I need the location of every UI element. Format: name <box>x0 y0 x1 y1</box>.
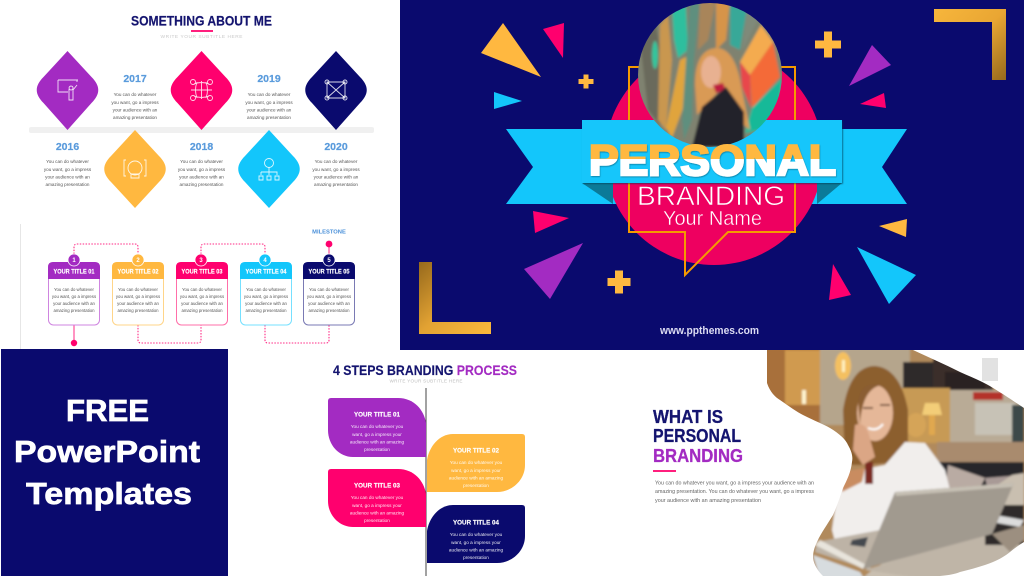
year 2016 block: amazing presentation <box>46 182 90 187</box>
leaf step 03: want, go a impress your <box>352 503 402 508</box>
title underline <box>191 30 213 32</box>
ribbon back <box>506 129 907 204</box>
timeline bar <box>29 127 374 133</box>
text: your name: Your Name <box>663 208 762 230</box>
leaf step 02: YOUR TITLE 02 <box>453 448 500 454</box>
paragraph: amazing presentation. You can do whatever you want, go a impress <box>655 489 814 495</box>
year 2019 block: You can do whatever <box>248 92 291 97</box>
card 3: You can do whatever <box>182 287 223 292</box>
card 1: YOUR TITLE 01 <box>54 270 95 276</box>
leaf step 04: want, go a impress your <box>451 540 501 545</box>
year 2016 block: your audience with an <box>45 174 90 180</box>
speech bubble outline <box>629 67 795 275</box>
diamond 2018 pink <box>171 51 232 130</box>
card 1: 1 <box>72 258 76 264</box>
card 5: you want, go a impress <box>307 294 351 299</box>
text: free: FREE <box>66 393 149 428</box>
leaf step 01: You can do whatever you <box>351 424 404 429</box>
leaf step 01: YOUR TITLE 01 <box>354 412 401 418</box>
panel: something about me timeline <box>29 14 374 208</box>
leaf step 01 <box>328 398 426 457</box>
pink circle <box>605 47 823 265</box>
heading lines: BRANDING <box>653 445 743 466</box>
card 1 <box>48 254 100 325</box>
card 5: amazing presentation <box>308 308 350 313</box>
card 4: You can do whatever <box>246 287 287 292</box>
diamond 2016 purple <box>37 51 98 130</box>
leaf step 04: audience with an amazing <box>449 548 503 552</box>
diamond 2019 cyan <box>238 130 300 208</box>
leaf step 01: audience with an amazing <box>350 440 404 444</box>
milestone label: MILESTONE <box>312 230 346 236</box>
year 2017 block <box>111 73 159 120</box>
leaf step 04: You can do whatever you <box>450 532 503 537</box>
subtitle: WRITE YOUR SUBTITLE HERE <box>390 378 462 384</box>
card 4: 4 <box>263 258 267 264</box>
leaf step 03: presentation <box>364 518 390 523</box>
heading lines: WHAT IS <box>653 406 723 427</box>
card 5: your audience with an <box>308 301 351 306</box>
card 4: your audience with an <box>245 301 288 306</box>
gold corner bottom left <box>419 262 491 334</box>
icon: plus signs <box>578 32 841 294</box>
card 4 <box>240 254 292 325</box>
ribbon front <box>582 120 842 183</box>
year 2017 block: amazing presentation <box>113 115 157 120</box>
card 4: amazing presentation <box>245 308 287 313</box>
leaf step 04: YOUR TITLE 04 <box>453 520 500 526</box>
card 2 <box>112 254 164 325</box>
dashed connectors <box>71 241 332 346</box>
year 2020 block <box>312 141 360 187</box>
card 1: amazing presentation <box>53 308 95 313</box>
panel: free powerpoint templates <box>1 349 228 576</box>
photo: woman with laptop <box>760 345 1024 576</box>
gold corner top right <box>934 9 1006 80</box>
paragraph <box>655 480 814 504</box>
card 2: You can do whatever <box>118 287 159 292</box>
leaf step 02: You can do whatever you <box>450 460 503 465</box>
leaf step 01: want, go a impress your <box>352 432 402 437</box>
panel: what is personal branding <box>653 345 1024 576</box>
heading underline <box>653 470 676 472</box>
year 2016 block <box>44 141 92 187</box>
leaf step 02: want, go a impress your <box>451 468 501 473</box>
diamond 2017 gold <box>104 130 166 208</box>
card 1: your audience with an <box>53 301 96 306</box>
year 2020 block: You can do whatever <box>315 159 358 164</box>
leaf step 04: presentation <box>463 555 489 560</box>
leaf step 02 <box>427 434 525 492</box>
heading: personal: PERSONAL <box>589 137 836 185</box>
card 2: you want, go a impress <box>116 294 160 299</box>
paragraph: your audience with an amazing presentation <box>655 498 761 504</box>
text: templates: Templates <box>26 476 192 511</box>
year 2019 block: 2019 <box>257 73 281 85</box>
card 1: You can do whatever <box>54 287 95 292</box>
website url: www.ppthemes.com <box>659 325 759 337</box>
title: something about me: SOMETHING ABOUT ME <box>131 14 272 28</box>
heading: branding: BRANDING <box>637 181 785 211</box>
year 2018 block: amazing presentation <box>180 182 224 187</box>
panel: 4 steps branding process <box>328 362 525 576</box>
year 2020 block: you want, go a impress <box>312 167 360 172</box>
card 4: you want, go a impress <box>244 294 288 299</box>
ribbon folds <box>582 183 842 204</box>
leaf step 03: You can do whatever you <box>351 495 404 500</box>
year 2016 block: You can do whatever <box>46 159 89 164</box>
year 2018 block: your audience with an <box>179 174 224 180</box>
subtitle: WRITE YOUR SUBTITLE HERE <box>160 34 242 40</box>
text: powerpoint: PowerPoint <box>14 434 200 469</box>
vertical stem <box>426 388 427 576</box>
card 3: 3 <box>199 258 203 264</box>
decorative confetti triangles <box>481 23 916 304</box>
card 2: YOUR TITLE 02 <box>118 270 159 276</box>
leaf step 04 <box>427 505 525 563</box>
heading lines <box>653 406 743 466</box>
year 2017 block: your audience with an <box>113 108 158 112</box>
card 2: amazing presentation <box>117 308 159 313</box>
card 2: your audience with an <box>117 301 160 306</box>
leaf step 03: audience with an amazing <box>350 510 404 516</box>
card 2: 2 <box>136 258 140 264</box>
year 2019 block <box>245 73 293 120</box>
leaf step 02: presentation <box>463 483 489 488</box>
photo: woman in circle <box>636 0 786 150</box>
card 3 <box>176 254 228 325</box>
card 5: YOUR TITLE 05 <box>308 270 350 276</box>
card 5: 5 <box>327 258 331 264</box>
card 3: amazing presentation <box>181 308 223 313</box>
card 3: your audience with an <box>181 301 224 306</box>
year 2018 block: you want, go a impress <box>178 167 226 172</box>
card 5 <box>303 254 355 325</box>
panel: personal branding cover <box>400 0 1024 350</box>
year 2020 block: your audience with an <box>314 174 359 180</box>
title: 4 steps branding process: 4 STEPS BRANDING PROCESS <box>333 362 517 378</box>
grey placeholder square <box>982 358 998 381</box>
year 2020 block: 2020 <box>324 141 348 153</box>
year 2017 block: you want, go a impress <box>111 100 159 105</box>
paragraph: You can do whatever you want, go a impress your audience with an <box>655 480 814 486</box>
year 2017 block: 2017 <box>123 73 147 85</box>
leaf step 02: audience with an amazing <box>449 476 503 480</box>
card 1: you want, go a impress <box>52 294 96 299</box>
card 3: YOUR TITLE 03 <box>182 270 223 276</box>
year 2018 block <box>178 141 226 187</box>
year 2019 block: your audience with an <box>247 108 292 112</box>
diamond 2020 navy <box>305 51 367 130</box>
year 2018 block: You can do whatever <box>180 159 223 164</box>
year 2019 block: amazing presentation <box>247 115 291 120</box>
card 5: You can do whatever <box>309 287 350 292</box>
year 2017 block: You can do whatever <box>114 92 157 97</box>
year 2019 block: you want, go a impress <box>245 100 293 105</box>
panel: milestone cards <box>20 224 355 349</box>
card 4: YOUR TITLE 04 <box>246 270 287 276</box>
year 2018 block: 2018 <box>190 141 213 153</box>
year 2020 block: amazing presentation <box>314 182 358 187</box>
year 2016 block: you want, go a impress <box>44 167 92 172</box>
leaf step 03: YOUR TITLE 03 <box>354 484 401 490</box>
heading lines: PERSONAL <box>653 425 741 446</box>
year 2016 block: 2016 <box>56 141 79 153</box>
leaf step 01: presentation <box>364 447 390 452</box>
card 3: you want, go a impress <box>180 294 224 299</box>
leaf step 03 <box>328 469 426 527</box>
